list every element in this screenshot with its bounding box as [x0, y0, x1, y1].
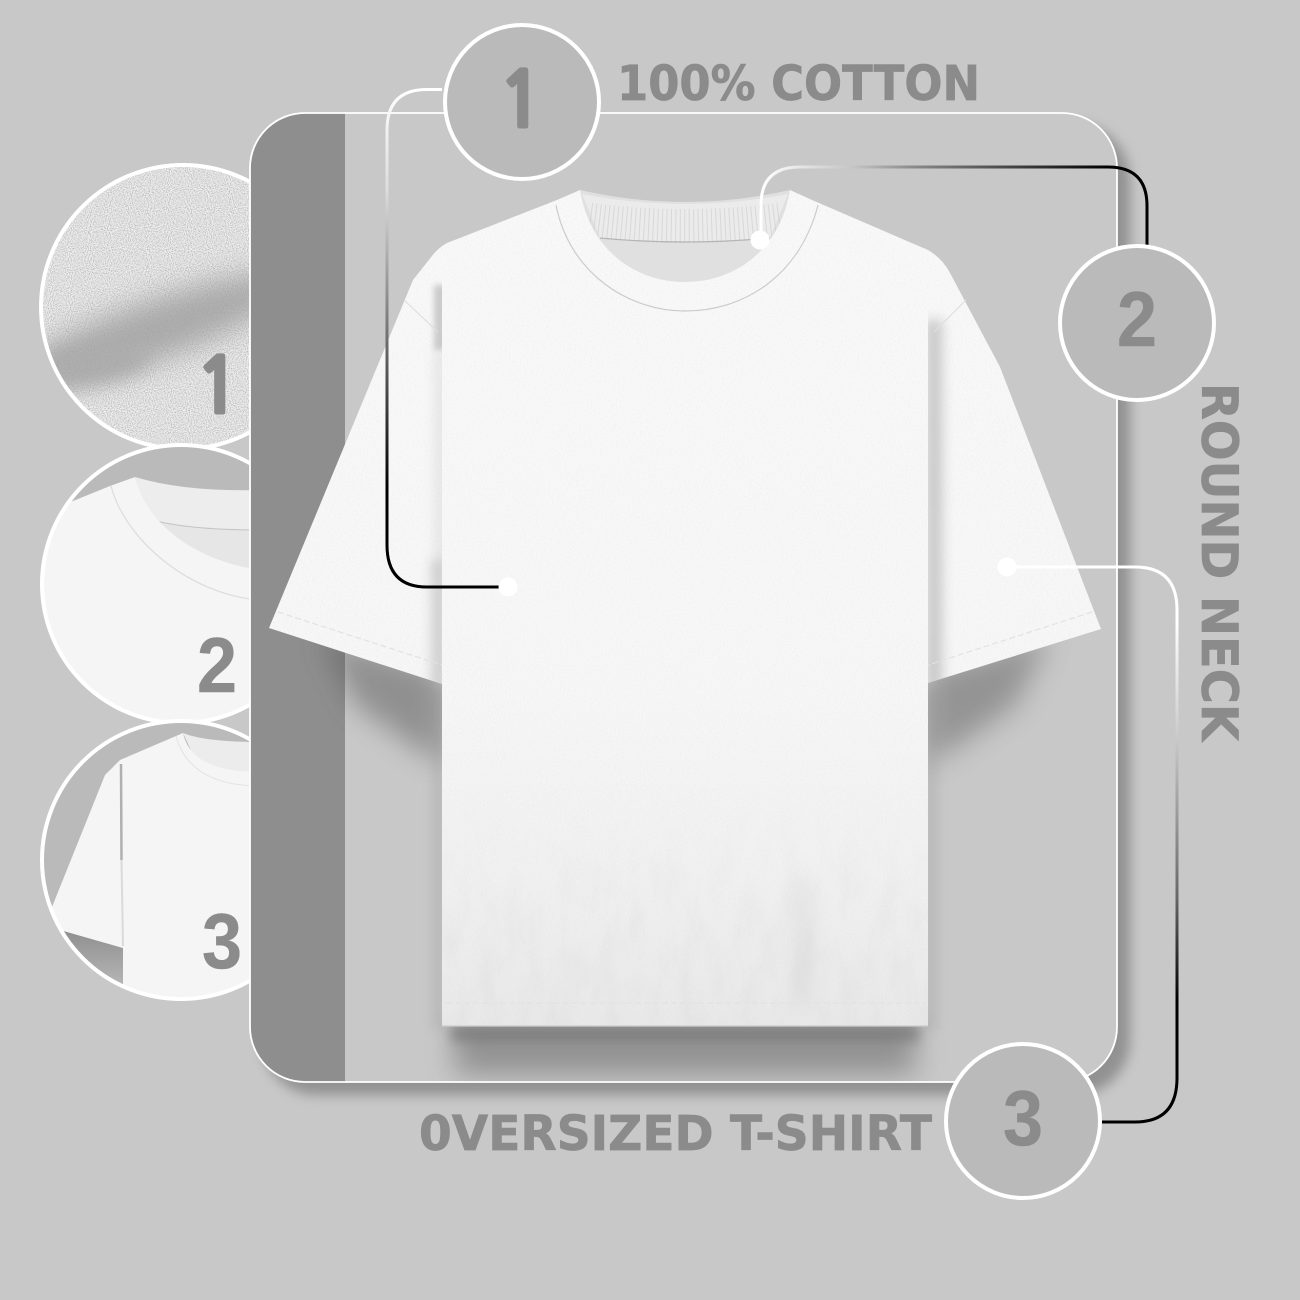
label: oversized t-shirt: 0VERSIZED T-SHIRT	[419, 1106, 932, 1162]
badge 1: 1	[498, 64, 544, 139]
label: 100% cotton: 100% COTTON	[617, 56, 980, 112]
shoulder seam	[404, 300, 966, 332]
badge 2	[1060, 246, 1214, 400]
number 1: 1	[195, 350, 241, 425]
badge 3: 3	[1003, 1074, 1043, 1162]
detail circle 3: oversized fit close-up	[40, 719, 250, 1001]
shirt shading and fabric detail	[269, 190, 1101, 1026]
badge 1	[445, 25, 599, 179]
callout line 3 with dot	[998, 558, 1177, 1122]
panel: dark side band	[250, 113, 345, 1082]
shirt body and sleeves	[269, 190, 1101, 1026]
number 3: 3	[202, 897, 242, 985]
badge 3	[946, 1044, 1100, 1198]
main panel	[250, 113, 1117, 1082]
badge 2: 2	[1117, 275, 1157, 363]
shirt shadow	[320, 635, 1050, 1074]
t-shirt	[269, 190, 1101, 1026]
detail circle 1: fabric texture	[39, 163, 250, 448]
detail circle 2: round neck close-up	[40, 443, 250, 722]
callout line 1 with dot	[387, 90, 518, 596]
hem stitching	[278, 612, 1092, 1003]
panel shadow	[262, 124, 1130, 1095]
detail circles	[39, 163, 250, 1001]
label: round neck: ROUND NECK	[1190, 383, 1248, 743]
collar stitching	[556, 205, 818, 311]
number 2: 2	[197, 621, 237, 709]
inside back of neck	[580, 190, 790, 285]
callout line 2 with dot	[750, 167, 1147, 250]
